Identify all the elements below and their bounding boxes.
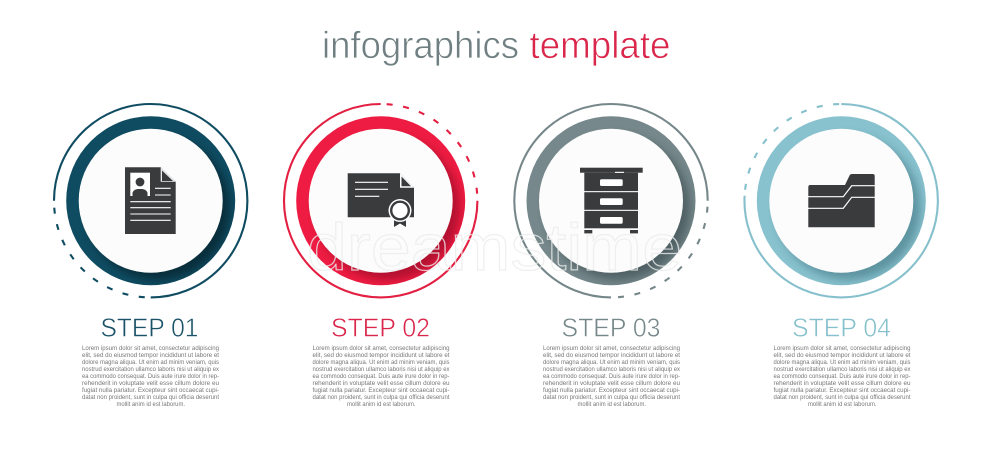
text block 02 bbox=[312, 345, 450, 408]
title: template bbox=[530, 25, 670, 67]
text block 03: Lorem ipsum dolor sit amet, consectetur adipiscing bbox=[543, 345, 680, 352]
panel: step 01 bbox=[54, 104, 247, 408]
text block 03: ea commodo consequat. Duis aute irure dolor in rep- bbox=[543, 373, 680, 380]
panel: step 04 bbox=[744, 104, 938, 408]
text block 03: rehenderit in voluptate velit esse cillum dolore eu bbox=[543, 380, 680, 387]
heading: step 03: STEP 03 bbox=[562, 312, 660, 342]
text block 01: datat non proident, sunt in culpa qui officia deserunt bbox=[82, 394, 219, 401]
text block 04: fugiat nulla pariatur. Excepteur sint occaecat cupi- bbox=[774, 387, 910, 394]
text block 02: nostrud exercitation ullamco laboris nisi ut aliquip ex bbox=[312, 366, 450, 373]
text block 01: fugiat nulla pariatur. Excepteur sint occaecat cupi- bbox=[82, 387, 219, 394]
panel: step 02 bbox=[284, 104, 477, 408]
ring graphic 01 bbox=[54, 104, 247, 297]
text block 03 bbox=[543, 345, 681, 408]
text block 01: Lorem ipsum dolor sit amet, consectetur adipiscing bbox=[82, 345, 219, 352]
heading: step 02: STEP 02 bbox=[331, 312, 430, 342]
text block 01: rehenderit in voluptate velit esse cillum dolore eu bbox=[82, 380, 219, 387]
text block 02: elit, sed do eiusmod tempor incididunt ut labore et bbox=[312, 352, 450, 359]
text block 03: nostrud exercitation ullamco laboris nisi ut aliquip ex bbox=[543, 366, 681, 373]
text block 04: rehenderit in voluptate velit esse cillum dolore eu bbox=[774, 380, 911, 387]
panel: step 03 bbox=[514, 104, 708, 408]
text block 03: dolore magna aliqua. Ut enim ad minim veniam, quis bbox=[543, 359, 680, 366]
ring graphic 04 bbox=[744, 104, 938, 297]
text block 04: dolore magna aliqua. Ut enim ad minim veniam, quis bbox=[774, 359, 910, 366]
text block 01: ea commodo consequat. Duis aute irure dolor in rep- bbox=[82, 373, 219, 380]
icon: resume document bbox=[125, 167, 176, 234]
text block 01 bbox=[82, 345, 220, 408]
icon: filing cabinet bbox=[580, 168, 643, 233]
heading: step 01: STEP 01 bbox=[100, 312, 198, 342]
text block 02: dolore magna aliqua. Ut enim ad minim veniam, quis bbox=[312, 359, 450, 366]
icon: certificate bbox=[348, 173, 414, 227]
text block 02: mollit anim id est laborum. bbox=[347, 401, 416, 408]
ring graphic 02 bbox=[284, 104, 477, 297]
text block 04: nostrud exercitation ullamco laboris nisi ut aliquip ex bbox=[774, 366, 911, 373]
text block 03: mollit anim id est laborum. bbox=[578, 401, 646, 408]
text block 04: datat non proident, sunt in culpa qui officia deserunt bbox=[774, 394, 911, 401]
icon: folder bbox=[808, 174, 875, 227]
text block 03: fugiat nulla pariatur. Excepteur sint occaecat cupi- bbox=[543, 387, 680, 394]
text block 03: elit, sed do eiusmod tempor incididunt ut labore et bbox=[543, 352, 680, 359]
text block 01: mollit anim id est laborum. bbox=[116, 401, 185, 408]
text block 04: mollit anim id est laborum. bbox=[808, 401, 877, 408]
text block 04: elit, sed do eiusmod tempor incididunt ut labore et bbox=[774, 352, 911, 359]
text block 01: nostrud exercitation ullamco laboris nisi ut aliquip ex bbox=[82, 366, 220, 373]
text block 04: ea commodo consequat. Duis aute irure dolor in rep- bbox=[774, 373, 910, 380]
text block 02: Lorem ipsum dolor sit amet, consectetur adipiscing bbox=[312, 345, 450, 352]
heading: step 04: STEP 04 bbox=[792, 312, 891, 342]
text block 02: datat non proident, sunt in culpa qui officia deserunt bbox=[312, 394, 450, 401]
text block 02: rehenderit in voluptate velit esse cillum dolore eu bbox=[312, 380, 450, 387]
watermark: dreamstime bbox=[307, 210, 682, 284]
text block 01: elit, sed do eiusmod tempor incididunt ut labore et bbox=[82, 352, 219, 359]
text block 03: datat non proident, sunt in culpa qui officia deserunt bbox=[543, 394, 680, 401]
text block 04: Lorem ipsum dolor sit amet, consectetur adipiscing bbox=[774, 345, 911, 352]
text block 02: fugiat nulla pariatur. Excepteur sint occaecat cupi- bbox=[312, 387, 450, 394]
ring graphic 03 bbox=[514, 104, 708, 297]
text block 02: ea commodo consequat. Duis aute irure dolor in rep- bbox=[312, 373, 450, 380]
title: infographics bbox=[322, 25, 519, 67]
title bbox=[322, 25, 670, 67]
text block 01: dolore magna aliqua. Ut enim ad minim veniam, quis bbox=[82, 359, 219, 366]
text block 04 bbox=[774, 345, 911, 408]
